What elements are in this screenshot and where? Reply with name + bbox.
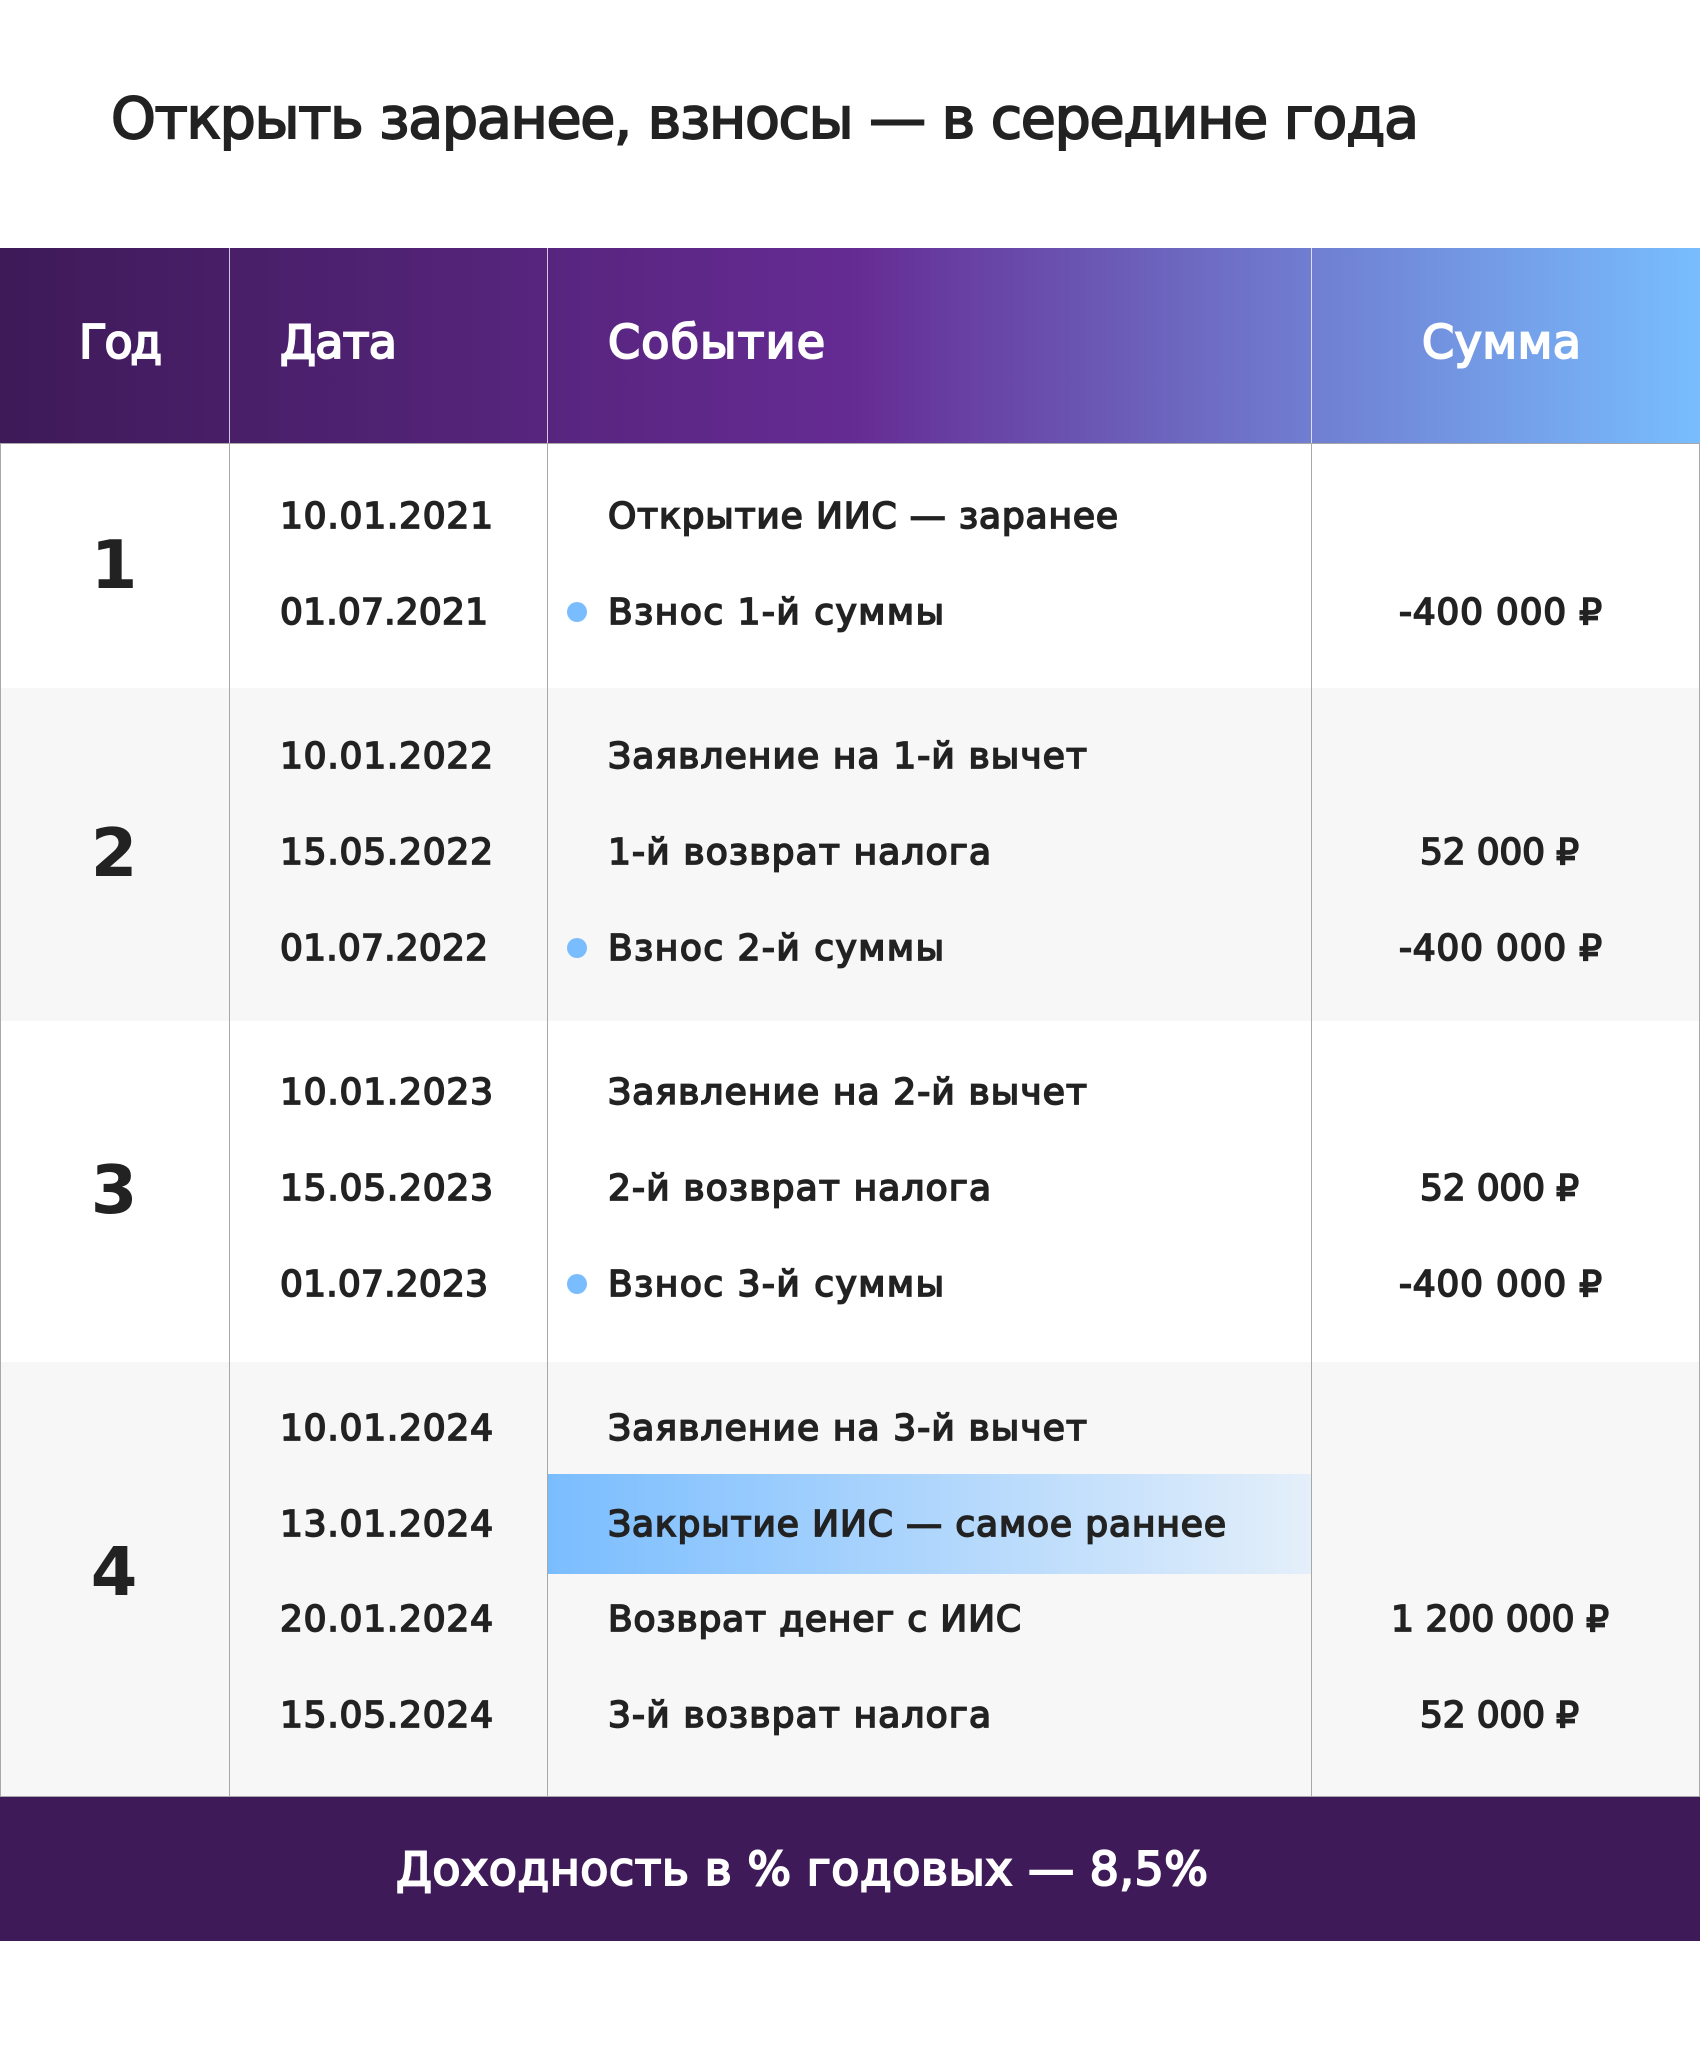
header: event: Событие [608, 315, 825, 369]
events: Заявление на 2-й вычет [608, 1072, 1087, 1113]
events: Взнос 1-й суммы [608, 592, 944, 633]
amounts: -400 000 ₽ [1399, 1264, 1602, 1305]
row backgrounds [0, 688, 1700, 1797]
dates: 15.05.2022 [280, 832, 493, 873]
events [608, 1408, 1226, 1736]
events: Заявление на 3-й вычет [608, 1408, 1087, 1449]
dates: 20.01.2024 [280, 1599, 493, 1640]
amounts [1399, 832, 1602, 969]
dates [280, 496, 493, 633]
year number 1: 1 [91, 526, 137, 604]
year 1 [91, 496, 1602, 633]
amounts [1399, 1168, 1602, 1305]
dates: 13.01.2024 [280, 1504, 493, 1545]
dates: 15.05.2024 [280, 1695, 493, 1736]
year 2 [91, 736, 1602, 969]
dates: 10.01.2024 [280, 1408, 493, 1449]
dates [280, 1072, 493, 1305]
amounts: -400 000 ₽ [1399, 928, 1602, 969]
events: Взнос 2-й суммы [608, 928, 944, 969]
dates: 01.07.2021 [280, 592, 488, 633]
highlight: closing row [547, 1474, 1312, 1574]
dates: 10.01.2021 [280, 496, 493, 537]
dates: 15.05.2023 [280, 1168, 493, 1209]
amount: -400 000 ₽ [1399, 592, 1602, 633]
year 3 [91, 1072, 1602, 1305]
title: Открыть заранее, взносы — в середине года [111, 86, 1419, 152]
events: Закрытие ИИС — самое раннее [608, 1504, 1226, 1545]
footer bar [0, 1797, 1700, 1941]
table header [0, 248, 1700, 443]
dates [280, 1408, 493, 1736]
amounts: 52 000 ₽ [1420, 832, 1579, 873]
year number 3: 3 [91, 1151, 137, 1229]
amounts: 1 200 000 ₽ [1391, 1599, 1609, 1640]
events [567, 736, 1087, 969]
events: 2-й возврат налога [608, 1168, 991, 1209]
year number 2: 2 [91, 814, 137, 892]
header: date: Дата [280, 315, 397, 369]
events [567, 1072, 1087, 1305]
footer text: Доходность в % годовых — 8,5% [396, 1842, 1208, 1896]
events: 3-й возврат налога [608, 1695, 991, 1736]
header: amount: Сумма [1422, 315, 1581, 369]
dates: 10.01.2022 [280, 736, 493, 777]
amounts: 52 000 ₽ [1420, 1695, 1579, 1736]
amounts: 52 000 ₽ [1420, 1168, 1579, 1209]
amounts [1391, 1599, 1609, 1736]
year 4 [91, 1408, 1609, 1736]
dates: 10.01.2023 [280, 1072, 493, 1113]
events: Заявление на 1-й вычет [608, 736, 1087, 777]
events: Возврат денег с ИИС [608, 1599, 1021, 1640]
events: Открытие ИИС — заранее [608, 496, 1118, 537]
events: 1-й возврат налога [608, 832, 991, 873]
dates [280, 736, 493, 969]
events [567, 496, 1118, 633]
events: Взнос 3-й суммы [608, 1264, 944, 1305]
year number 4: 4 [91, 1533, 137, 1611]
header: year: Год [79, 315, 162, 369]
dates: 01.07.2022 [280, 928, 488, 969]
dates: 01.07.2023 [280, 1264, 488, 1305]
